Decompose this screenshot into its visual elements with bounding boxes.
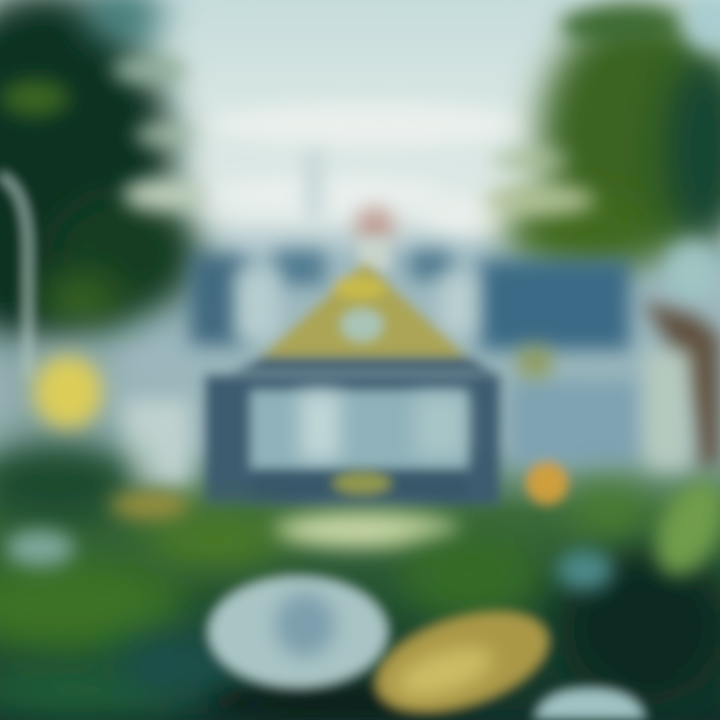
tree trunk [640,300,720,465]
building: background facade [0,250,690,485]
orange fruit right [526,462,568,504]
glowing lamp left [34,356,102,428]
lawn [270,512,460,548]
tree: left dark foliage [0,0,207,350]
orange blur left [110,491,190,519]
left pole [0,175,28,380]
white coin [208,576,388,688]
spire [305,150,395,270]
house: central porch [205,375,500,505]
house: yellow gable roof [230,262,500,378]
foreground foliage [0,440,720,720]
golden capsule [363,592,561,720]
tree: right olive foliage [485,0,720,302]
small white coin bottom right [534,688,646,720]
